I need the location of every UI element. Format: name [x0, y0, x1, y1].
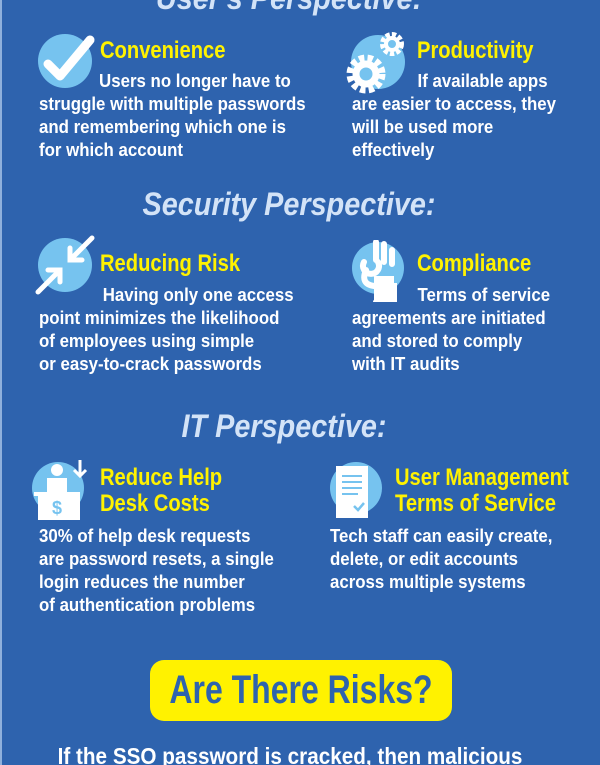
heading: reduce help desk costs: Reduce Help — [100, 464, 222, 491]
text: reducing risk: point minimizes the likelihood — [39, 307, 279, 328]
heading: IT perspective: IT Perspective: — [182, 408, 386, 444]
icon: help desk — [32, 460, 87, 520]
heading: reducing risk: Reducing Risk — [100, 250, 240, 277]
icon: help desk: $ — [52, 498, 62, 518]
heading: reduce help desk costs — [100, 464, 222, 517]
heading: user management: Terms of Service — [395, 490, 556, 517]
text: compliance: agreements are initiated — [352, 307, 546, 328]
icon: ok hand — [352, 240, 404, 302]
text: convenience: Users no longer have to — [99, 70, 291, 91]
text: convenience: struggle with multiple passwords — [39, 93, 306, 114]
text: help desk: login reduces the number — [39, 571, 245, 592]
text: compliance: and stored to comply — [352, 330, 522, 351]
text: productivity: will be used more — [352, 116, 493, 137]
callout: are there risks — [150, 660, 452, 721]
heading: compliance: Compliance — [417, 250, 531, 277]
icon: gears — [346, 32, 405, 94]
text: help desk: of authentication problems — [39, 594, 255, 615]
text: help desk: 30% of help desk requests — [39, 525, 250, 546]
callout: are there risks: Are There Risks? — [169, 668, 433, 712]
text: user management: delete, or edit accounts — [330, 548, 518, 569]
text: user management: across multiple systems — [330, 571, 526, 592]
icon: arrows in — [36, 236, 94, 294]
text: convenience: and remembering which one is — [39, 116, 286, 137]
text: reducing risk: Having only one access — [103, 284, 294, 305]
icon: checkmark — [38, 34, 94, 88]
text: productivity — [352, 70, 556, 160]
text: reducing risk — [39, 284, 294, 374]
text: user management — [330, 525, 552, 592]
text: help desk: are password resets, a single — [39, 548, 274, 569]
text: productivity: If available apps — [418, 70, 548, 91]
text: productivity: effectively — [352, 139, 434, 160]
heading: security perspective: Security Perspective: — [143, 186, 435, 222]
text: compliance — [352, 284, 550, 374]
text: help desk — [39, 525, 274, 615]
heading: user management: User Management — [395, 464, 569, 491]
text: reducing risk: or easy-to-crack passwords — [39, 353, 262, 374]
text: compliance: Terms of service — [418, 284, 550, 305]
icon: document — [330, 462, 382, 518]
text: user management: Tech staff can easily create, — [330, 525, 552, 546]
heading: productivity: Productivity — [417, 37, 534, 64]
text: convenience — [39, 70, 306, 160]
heading: convenience: Convenience — [100, 37, 225, 64]
text: convenience: for which account — [39, 139, 183, 160]
text: compliance: with IT audits — [352, 353, 460, 374]
heading: user management — [395, 464, 569, 517]
text: reducing risk: of employees using simple — [39, 330, 254, 351]
heading: reduce help desk costs: Desk Costs — [100, 490, 210, 517]
text: productivity: are easier to access, they — [352, 93, 556, 114]
